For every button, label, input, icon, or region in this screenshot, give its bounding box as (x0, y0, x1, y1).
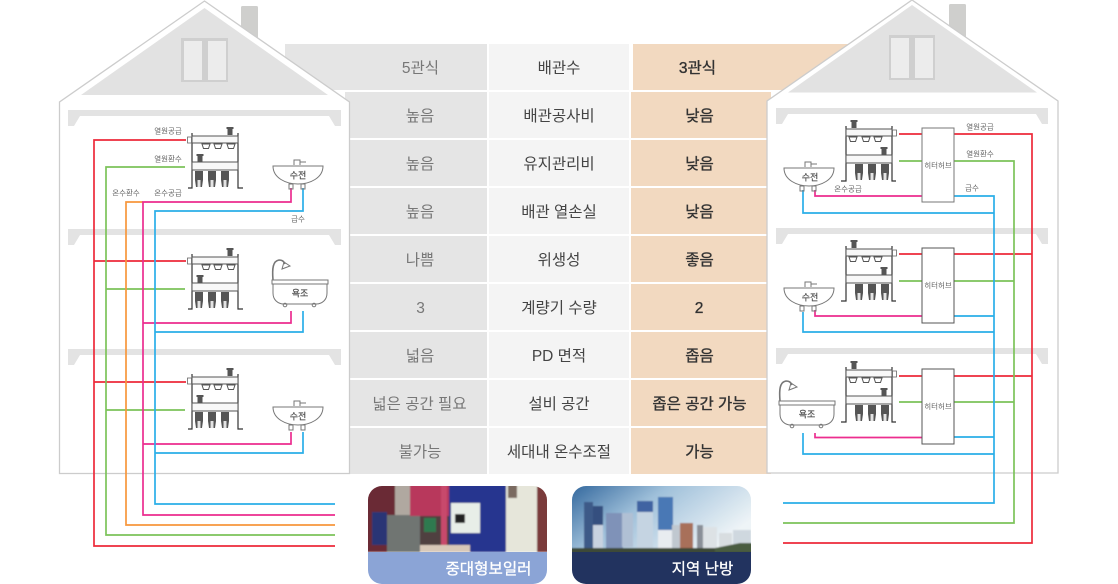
table row: 설비 공간: 넓은 공간 필요 (372, 395, 467, 413)
panel: right house, 3-pipe system (767, 0, 1058, 543)
heater hub, lower floor: 히터허브 (924, 401, 952, 411)
table row: 유지관리비: 낮음 (685, 155, 714, 173)
hot water supply pipe (815, 190, 922, 438)
comparison table (285, 44, 858, 474)
table row: 배관공사비: 높음 (406, 107, 434, 125)
cold water pipe (155, 188, 335, 504)
card: district heating (568, 482, 755, 584)
table row: 세대내 온수조절: 불가능 (399, 443, 441, 461)
table row: 위생성: 좋음 (685, 251, 714, 269)
table row: 계량기 수량: 계량기 수량 (521, 299, 597, 317)
table row: 위생성: 위생성 (538, 251, 580, 269)
icon: sink, middle floor: 수전 (802, 292, 818, 302)
icon: chimney (241, 6, 258, 40)
icon: sink, upper floor: 수전 (290, 170, 306, 180)
hot water supply pipe (143, 188, 335, 515)
icon: chimney (949, 4, 966, 38)
table row: PD 면적: 좁음 (685, 347, 714, 365)
table row: PD 면적: PD 면적 (532, 347, 586, 365)
label: 지역 난방 (672, 560, 733, 578)
pipe labels (834, 122, 994, 194)
table row: 배관수: 배관수 (538, 59, 580, 77)
icon: attic window (181, 38, 228, 82)
icon: bathtub: 욕조 (292, 288, 308, 298)
icon: sink, upper floor: 수전 (802, 172, 818, 182)
table row: 배관 열손실: 배관 열손실 (521, 203, 597, 221)
table row: 배관공사비 (345, 92, 771, 138)
floor slabs (776, 108, 1048, 364)
table row: 세대내 온수조절: 세대내 온수조절 (507, 443, 611, 461)
house outline (60, 1, 350, 474)
heating return pipe (783, 161, 1014, 523)
cold water pipe (783, 190, 994, 503)
house outline (767, 0, 1058, 473)
city skyline photo (572, 486, 751, 552)
boiler room photo (364, 482, 551, 552)
icon: bathtub (272, 260, 328, 307)
icon: sink, upper floor (273, 160, 323, 189)
table row: PD 면적: 넓음 (406, 347, 434, 365)
label: 중대형보일러 (445, 560, 532, 578)
table row: 유지관리비 (345, 140, 771, 186)
manifolds (188, 127, 243, 429)
table row: 유지관리비: 유지관리비 (523, 155, 595, 173)
pipe labels: 온수공급 (834, 184, 862, 194)
table row: 배관공사비: 낮음 (685, 107, 714, 125)
label bar (572, 552, 751, 584)
heater hub, middle floor (922, 248, 954, 323)
table row: 유지관리비: 높음 (406, 155, 434, 173)
pipe labels: 열원환수 (966, 148, 994, 158)
icon: bathtub: 욕조 (799, 410, 815, 420)
table row: 계량기 수량: 2 (695, 300, 703, 317)
pipe labels: 열원공급 (154, 126, 182, 136)
label bar (368, 552, 547, 584)
heater hub, upper floor: 히터허브 (924, 160, 952, 170)
table row: 계량기 수량 (345, 284, 771, 330)
panel: left house, 5-pipe system (60, 1, 350, 546)
table row: 배관 열손실: 높음 (406, 203, 434, 221)
heating supply pipe (783, 134, 1032, 543)
table row: 설비 공간 (345, 380, 771, 426)
icon: sink, lower floor (273, 401, 323, 430)
table row: 계량기 수량: 3 (416, 300, 425, 317)
heating supply pipe (94, 140, 335, 546)
pipe labels: 열원환수 (154, 154, 182, 164)
manifolds (841, 120, 896, 422)
pipe labels: 급수 (291, 214, 305, 224)
icon: sink, middle floor (784, 282, 834, 311)
pipe labels: 온수공급 (154, 188, 182, 198)
pipe labels: 온수환수 (112, 188, 140, 198)
heating return pipe (106, 167, 335, 535)
floor slabs (68, 110, 341, 365)
table row: 배관 열손실: 낮음 (685, 203, 714, 221)
table row: 세대내 온수조절 (345, 428, 771, 474)
table row: PD 면적 (345, 332, 771, 378)
table row: 세대내 온수조절: 가능 (685, 443, 714, 461)
table row: 배관수: 5관식 (402, 59, 439, 77)
icon: sink, upper floor (784, 162, 834, 191)
pipe labels: 열원공급 (966, 122, 994, 132)
heater hub, middle floor: 히터허브 (924, 280, 952, 290)
icon: attic window (889, 35, 935, 80)
heater hub, upper floor (922, 128, 954, 202)
roof (81, 8, 328, 95)
icon: sink, lower floor: 수전 (290, 412, 306, 422)
card: medium-large boiler (364, 482, 551, 584)
table row: 위생성 (345, 236, 771, 282)
pipe labels: 급수 (965, 184, 979, 192)
hot water return pipe (126, 202, 335, 525)
table row: 배관수 (285, 44, 858, 90)
table row: 배관공사비: 배관공사비 (523, 107, 595, 125)
table row: 배관 열손실 (345, 188, 771, 234)
roof (788, 5, 1037, 92)
table row: 위생성: 나쁨 (406, 251, 434, 269)
table row: 설비 공간: 설비 공간 (528, 395, 590, 413)
heater hub, lower floor (922, 369, 954, 444)
icon: bathtub (779, 381, 835, 428)
table row: 배관수: 3관식 (679, 59, 716, 77)
table row: 설비 공간: 좁은 공간 가능 (652, 395, 747, 413)
pipe labels (112, 126, 305, 224)
